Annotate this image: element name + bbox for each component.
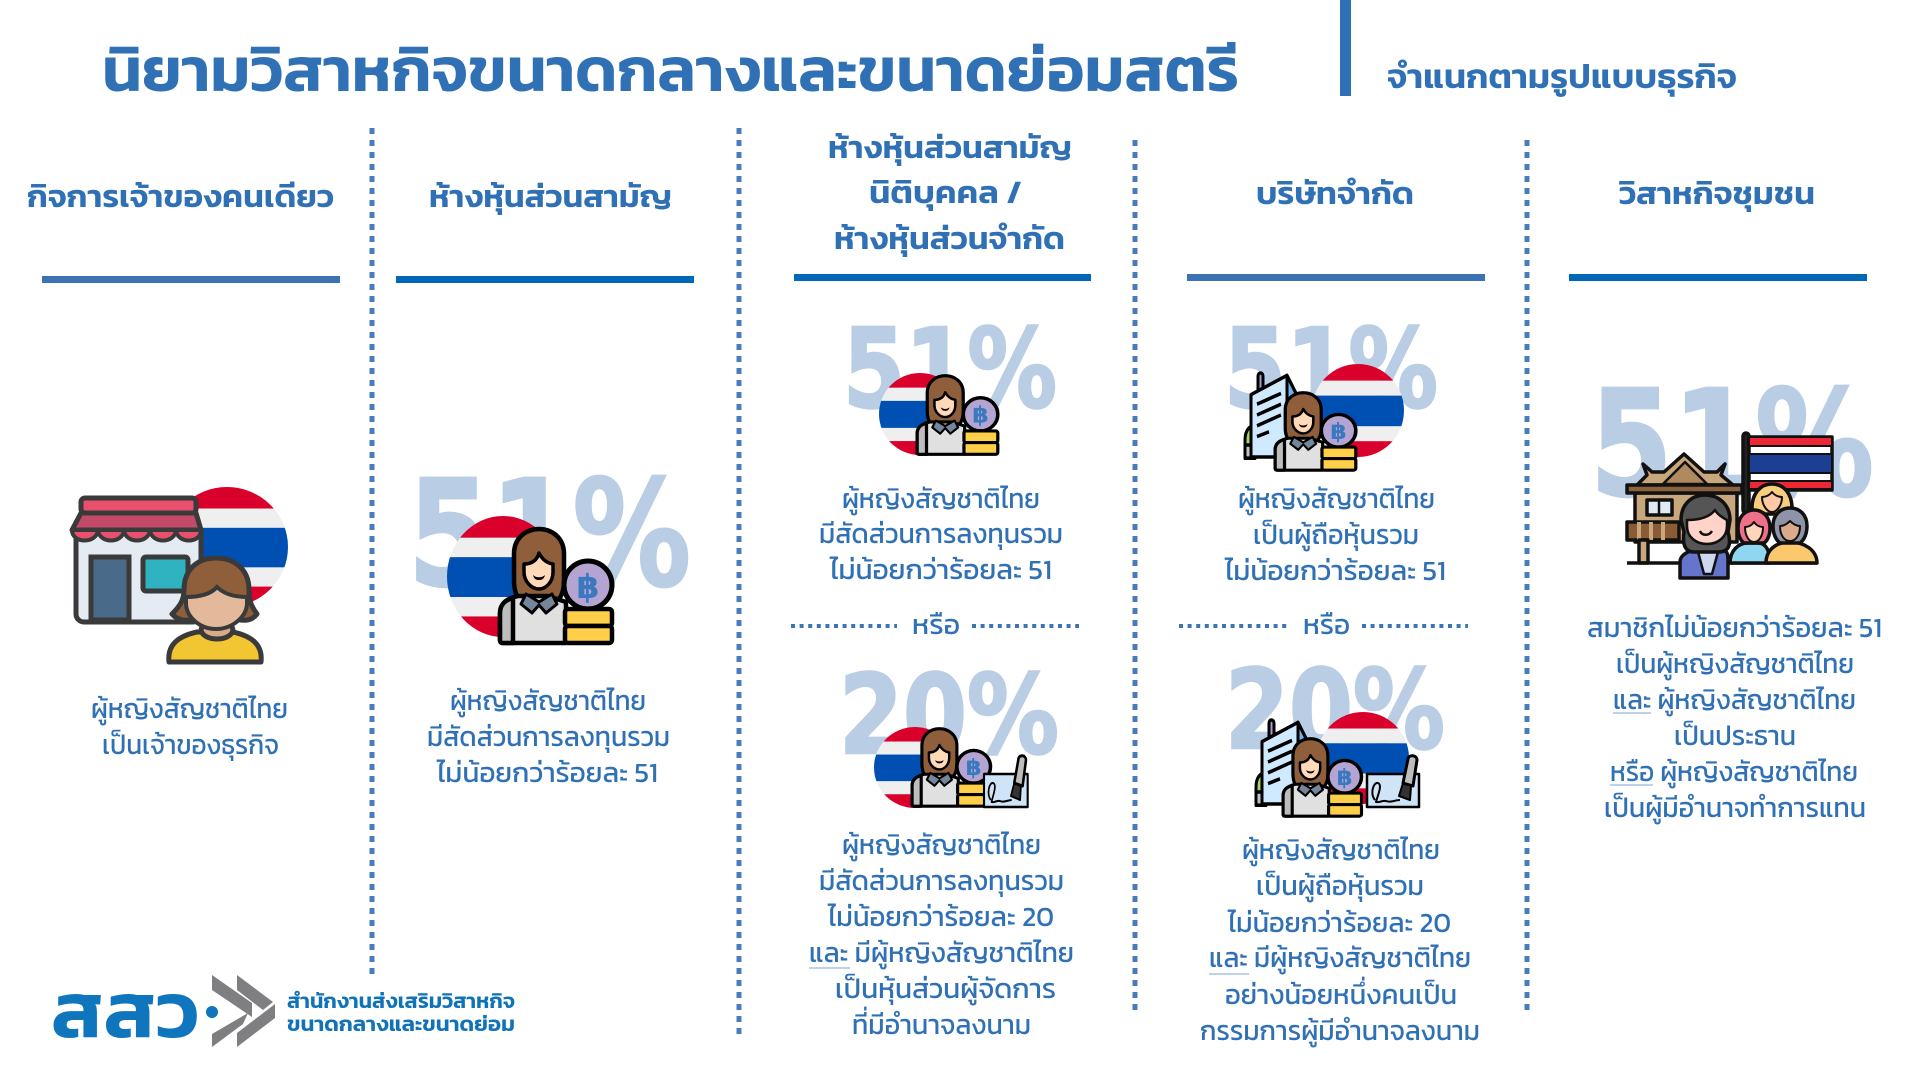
icon: shop and woman with Thai flag [72, 487, 288, 662]
description: ไม่น้อยกว่าร้อยละ 51 [436, 752, 658, 794]
description 20%: ไม่น้อยกว่าร้อยละ 20 [827, 896, 1054, 938]
title: นิยามวิสาหกิจขนาดกลางและขนาดย่อมสตรี [102, 24, 1239, 116]
description [427, 680, 670, 794]
heading rule [794, 274, 1091, 281]
or divider: หรือ [1303, 604, 1350, 646]
description: และ ผู้หญิงสัญชาติไทย [1613, 679, 1856, 721]
logo organisation name: สำนักงานส่งเสริมวิสาหกิจ [287, 986, 515, 1017]
icon: businesswoman with flag and signed document: ฿ [966, 755, 982, 781]
heading: ordinary partnership: ห้างหุ้นส่วนสามัญ [429, 172, 672, 220]
description 51%: ผู้หญิงสัญชาติไทย [1238, 478, 1435, 520]
subtitle: จำแนกตามรูปแบบธุรกิจ [1387, 52, 1737, 102]
description: ผู้หญิงสัญชาติไทย [450, 680, 646, 722]
description 20%: และ มีผู้หญิงสัญชาติไทย [809, 932, 1074, 974]
description: หรือ ผู้หญิงสัญชาติไทย [1610, 751, 1858, 793]
panel: ordinary partnership [396, 172, 694, 794]
description 20%: ผู้หญิงสัญชาติไทย [842, 824, 1041, 866]
icon: building, businesswoman, flag and signed document: ฿ [1337, 765, 1353, 791]
heading rule [396, 276, 694, 283]
panel: limited company [1179, 169, 1485, 1052]
heading: limited company: บริษัทจำกัด [1256, 169, 1414, 217]
or divider: หรือ [912, 604, 960, 646]
panel: community enterprise [1569, 169, 1882, 829]
big figure 51%: 51% [1224, 305, 1438, 433]
description 51% [1224, 478, 1446, 592]
description: เป็นประธาน [1674, 715, 1796, 757]
icon: businesswoman with Thai flag [447, 516, 612, 643]
heading: registered / limited partnership: ห้างหุ้นส่วนจำกัด [834, 214, 1065, 262]
description 20% [1200, 829, 1480, 1052]
icon: businesswoman with flag [879, 373, 998, 455]
icon: building, businesswoman and flag [1245, 364, 1404, 470]
heading: registered / limited partnership: นิติบุคคล / [869, 168, 1022, 216]
description 20%: เป็นหุ้นส่วนผู้จัดการ [835, 968, 1056, 1010]
description: เป็นเจ้าของธุรกิจ [102, 724, 279, 766]
heading: registered / limited partnership [828, 123, 1072, 262]
logo dot [206, 1006, 218, 1018]
icon: building, businesswoman, flag and signed document [1256, 712, 1419, 816]
heading rule [1187, 274, 1485, 281]
description: มีสัดส่วนการลงทุนรวม [427, 716, 670, 758]
description 20%: ที่มีอำนาจลงนาม [852, 1004, 1031, 1046]
icon: businesswoman with Thai flag: ฿ [577, 567, 599, 606]
icon: businesswoman with flag: ฿ [972, 402, 989, 428]
icon: Thai house, women group and flag [1627, 433, 1832, 578]
description: ผู้หญิงสัญชาติไทย [91, 688, 288, 730]
description: สมาชิกไม่น้อยกว่าร้อยละ 51 [1587, 607, 1882, 649]
heading: registered / limited partnership: ห้างหุ้นส่วนสามัญ [828, 123, 1072, 171]
description 20%: อย่างน้อยหนึ่งคนเป็น [1225, 974, 1457, 1016]
icon: businesswoman with flag and signed document [874, 727, 1028, 808]
description 51%: เป็นผู้ถือหุ้นรวม [1253, 514, 1419, 556]
logo wordmark: สสว [51, 951, 199, 1068]
big figure 20%: 20% [1225, 646, 1445, 774]
heading rule [42, 276, 340, 283]
description 20%: และ มีผู้หญิงสัญชาติไทย [1209, 937, 1471, 979]
heading: community enterprise: วิสาหกิจชุมชน [1618, 169, 1815, 217]
heading: sole proprietor: กิจการเจ้าของคนเดียว [27, 172, 334, 220]
panel: sole proprietor [27, 172, 340, 766]
logo organisation name [287, 986, 515, 1040]
big figure 20%: 20% [839, 651, 1059, 779]
description 51%: ไม่น้อยกว่าร้อยละ 51 [829, 549, 1052, 591]
description [1587, 607, 1882, 829]
icon: building, businesswoman and flag: ฿ [1330, 419, 1347, 445]
big figure 51%: 51% [843, 305, 1057, 433]
description 20%: ผู้หญิงสัญชาติไทย [1242, 829, 1440, 871]
description 20%: เป็นผู้ถือหุ้นรวม [1256, 865, 1424, 907]
logo organisation name: ขนาดกลางและขนาดย่อม [287, 1009, 515, 1040]
description 20%: มีสัดส่วนการลงทุนรวม [819, 860, 1064, 902]
description 51% [819, 478, 1063, 591]
description 51%: ไม่น้อยกว่าร้อยละ 51 [1224, 550, 1446, 592]
heading rule [1569, 274, 1867, 281]
title divider bar [1340, 0, 1351, 96]
description: เป็นผู้มีอำนาจทำการแทน [1604, 787, 1866, 829]
panel: registered partnership / limited partnership [791, 123, 1091, 1046]
description 20% [809, 824, 1074, 1046]
description 51%: ผู้หญิงสัญชาติไทย [842, 478, 1040, 520]
logo chevrons [212, 975, 275, 1047]
logo: OSMEP [51, 951, 515, 1068]
description: เป็นผู้หญิงสัญชาติไทย [1616, 643, 1854, 685]
big figure 51%: 51% [408, 449, 691, 620]
description 20%: กรรมการผู้มีอำนาจลงนาม [1200, 1010, 1480, 1052]
description [91, 688, 288, 766]
description 51%: มีสัดส่วนการลงทุนรวม [819, 513, 1063, 555]
description 20%: ไม่น้อยกว่าร้อยละ 20 [1227, 902, 1451, 944]
